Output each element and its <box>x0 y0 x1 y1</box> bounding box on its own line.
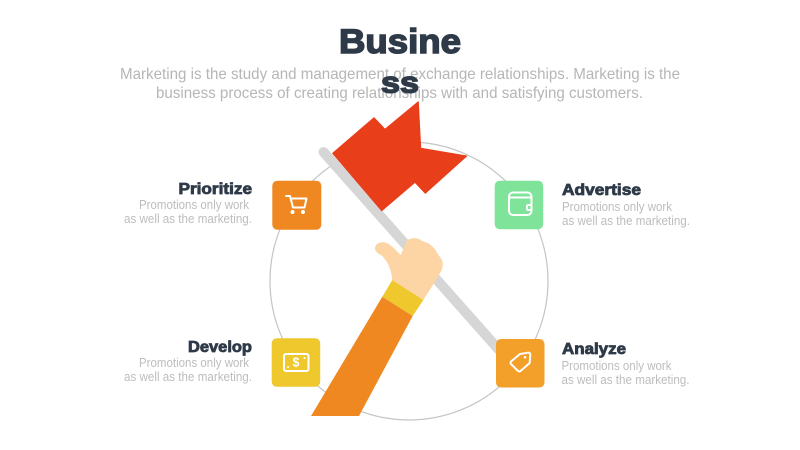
text: prioritize: Promotions only work <box>139 197 249 212</box>
panel: prioritize <box>124 181 321 230</box>
text: advertise: as well as the marketing. <box>562 213 690 228</box>
panel: analyze <box>496 339 690 388</box>
text: develop <box>124 355 252 384</box>
text: prioritize: as well as the marketing. <box>124 211 252 226</box>
text: advertise: Promotions only work <box>562 199 672 214</box>
subtitle: Marketing is the study and management of exchange relationships. Marketing is the <box>120 66 680 83</box>
icon: wallet <box>495 181 543 229</box>
icon: money <box>272 338 320 387</box>
subtitle: business process of creating relationships with and satisfying customers. <box>156 85 643 102</box>
text: advertise <box>562 199 690 228</box>
subtitle <box>120 66 680 102</box>
title: ss <box>381 66 419 100</box>
text: analyze: Promotions only work <box>562 358 672 373</box>
text: prioritize <box>124 197 252 226</box>
title: Busine <box>339 23 461 61</box>
heading: advertise: Advertise <box>562 182 641 199</box>
text: analyze <box>562 358 690 387</box>
flag pole <box>324 152 500 351</box>
panel: develop <box>124 338 320 387</box>
icon: money: $ <box>293 356 300 370</box>
text: develop: as well as the marketing. <box>124 369 252 384</box>
icon: cart <box>272 181 321 230</box>
hand <box>375 238 443 300</box>
flag <box>333 102 467 211</box>
heading: develop: Develop <box>188 339 252 356</box>
ring <box>270 142 548 420</box>
text: analyze: as well as the marketing. <box>562 372 690 387</box>
heading: prioritize: Prioritize <box>178 181 252 198</box>
panel: advertise <box>495 181 690 229</box>
heading: analyze: Analyze <box>562 341 626 358</box>
text: develop: Promotions only work <box>139 355 249 370</box>
arm and hand <box>311 238 443 416</box>
cuff <box>382 280 423 316</box>
title <box>339 23 461 100</box>
sleeve <box>311 297 413 416</box>
icon: tag <box>496 339 544 388</box>
